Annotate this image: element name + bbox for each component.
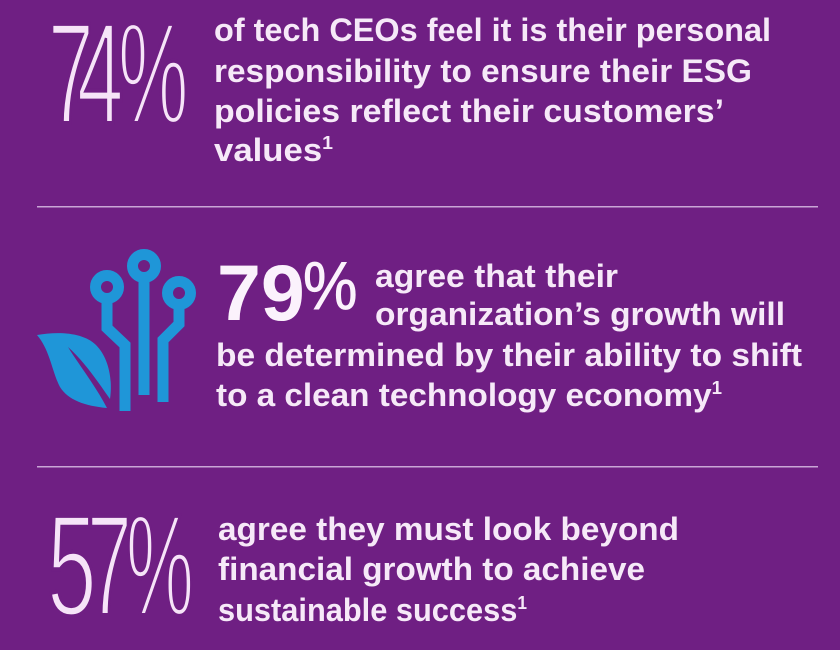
text: 74% description: of tech CEOs feel it is their personal bbox=[214, 12, 771, 48]
text: 79% description: 1 bbox=[712, 378, 722, 398]
text: 74% description: policies reflect their customers’ bbox=[214, 93, 724, 129]
text: 79% description: be determined by their ability to shift bbox=[216, 337, 802, 373]
number: percent sign: % bbox=[303, 247, 357, 324]
text: 74% description: values bbox=[214, 132, 314, 168]
text: 79% description: organization’s growth will bbox=[375, 296, 785, 332]
stat 79% bbox=[37, 247, 802, 413]
text: 79% description: to a clean technology economy bbox=[216, 377, 693, 413]
number: 74% bbox=[48, 0, 188, 154]
stat 57% bbox=[47, 484, 679, 646]
number: 57% bbox=[47, 484, 194, 646]
text: 57% description: 1 bbox=[517, 593, 527, 613]
text: 57% description: agree they must look beyond bbox=[218, 511, 679, 547]
number: 79: 79 bbox=[217, 248, 305, 337]
text: 57% description bbox=[218, 511, 679, 628]
text: 79% description: agree that their bbox=[375, 258, 618, 294]
text: 57% description: sustainable success bbox=[218, 592, 529, 628]
text: 74% description bbox=[214, 12, 771, 168]
stat 74% bbox=[48, 0, 771, 168]
text: 57% description: financial growth to achieve bbox=[218, 551, 645, 587]
text: 79% description bbox=[216, 258, 802, 413]
number: 57%: 7 bbox=[87, 484, 132, 646]
icon: circuit leaf bbox=[37, 254, 190, 411]
text: 74% description: 1 bbox=[322, 133, 333, 153]
number: 57%: % bbox=[126, 486, 194, 646]
text: 74% description: responsibility to ensure their ESG bbox=[214, 53, 752, 89]
number: 57%: 5 bbox=[47, 486, 97, 646]
